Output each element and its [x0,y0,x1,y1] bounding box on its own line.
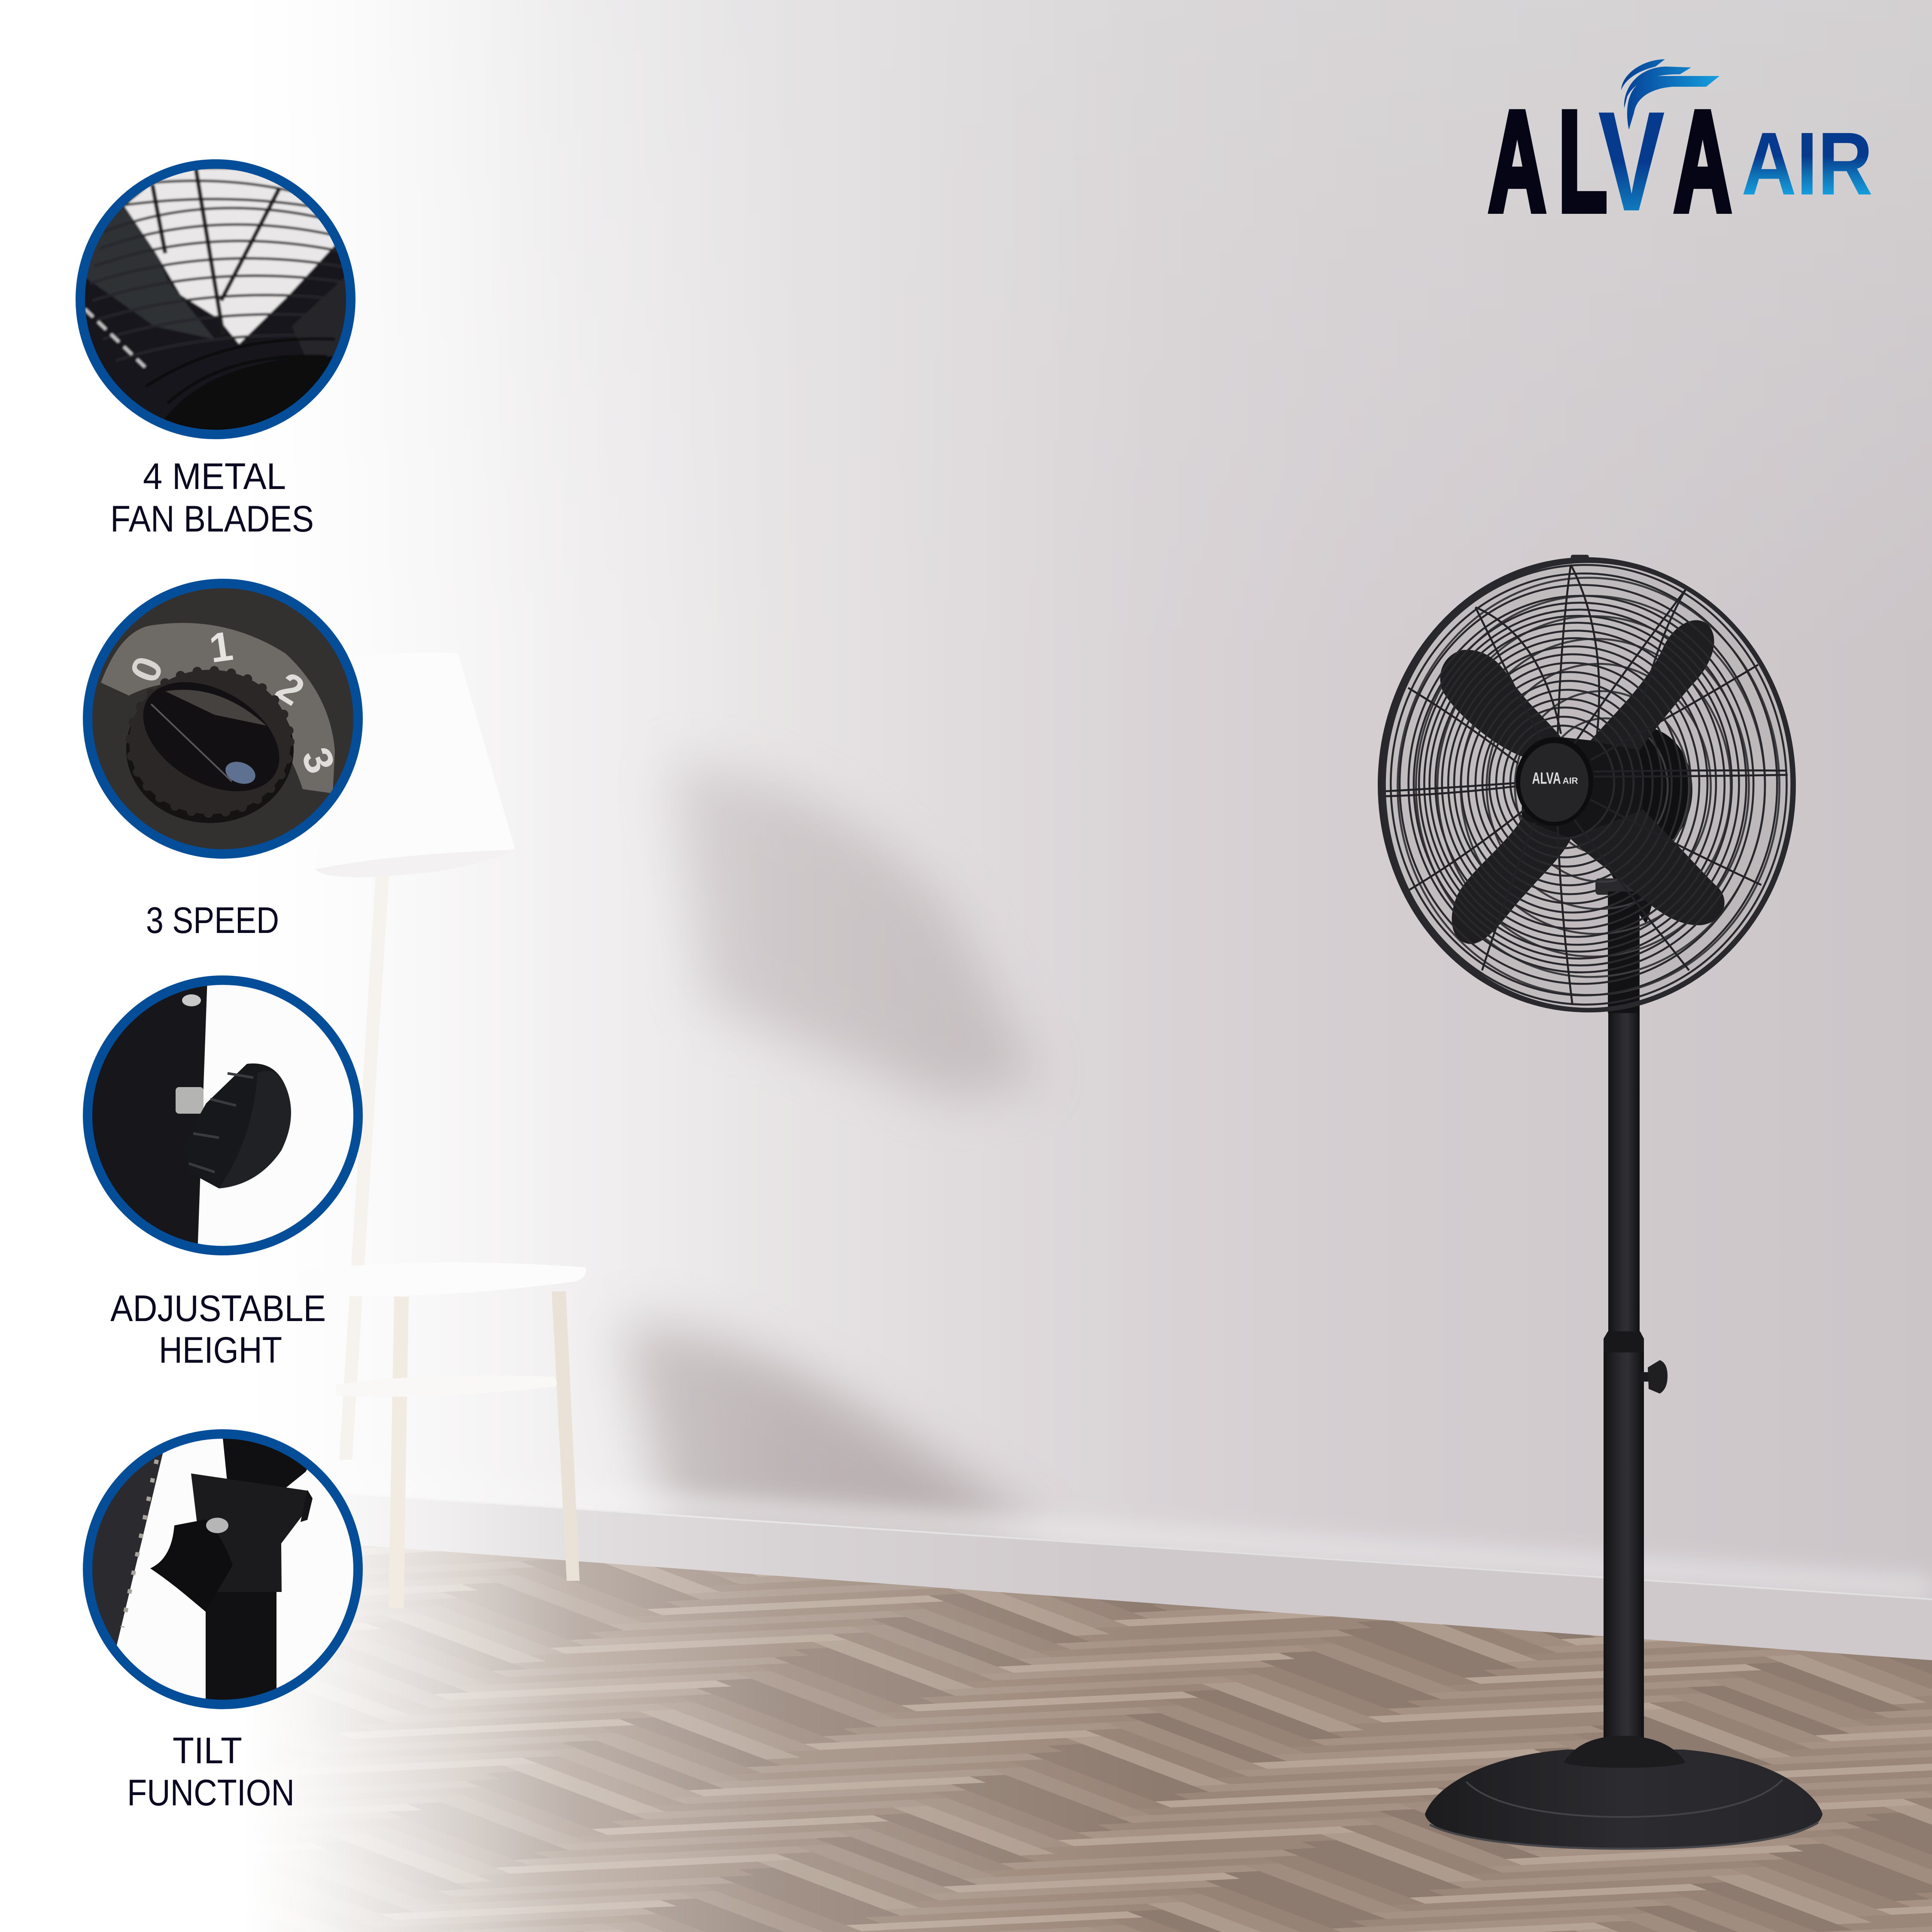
fan head [1380,555,1794,1013]
photo: tilt bracket [86,1434,361,1717]
lamp shade underside [315,850,515,877]
logo wordmark ALVA [1488,82,1732,240]
photo: speed knob [86,584,361,859]
label: tilt function: TILT [173,1730,242,1771]
photo: grille and blades [82,165,356,436]
photo: speed knob: 2 [268,663,312,714]
feature 4: tilt joint [86,1434,361,1717]
logo wordmark AIR: AIR [1741,114,1873,214]
logo feathers [1621,59,1719,130]
height knob [1640,1360,1668,1394]
photo: speed knob: 0 [121,650,172,689]
lamp and stool [299,653,586,1608]
label: 4 metal fan blades [110,456,314,540]
feature 2: speed dial [86,583,361,859]
label: adjustable height: ADJUSTABLE [110,1288,326,1329]
shadow: lamp shade on wall [670,764,1039,1099]
baseboard [0,1460,1932,1660]
fan pole lower [1604,1352,1644,1747]
shadow: stool on wall [618,1322,1048,1537]
hub with badge: AIR [1563,776,1578,786]
lamp shade [315,653,515,877]
rear grille wires [1397,578,1780,995]
label: tilt function [127,1730,295,1814]
logo wordmark ALVA: V [1598,82,1665,240]
hub with badge: ALVA [1532,769,1561,788]
grille tint [1380,559,1792,1010]
motor [1587,727,1692,1013]
logo: ALVA AIR [1488,59,1873,240]
stand fan product [1380,555,1823,1849]
ring [80,164,351,434]
photo: height knob on pole [86,979,361,1254]
photo: speed knob: 1 [207,623,236,671]
grille spokes [1383,565,1788,1005]
stool back leg [552,1291,580,1581]
label: 4 metal fan blades: FAN BLADES [110,498,314,540]
fan blades [1440,620,1725,944]
label: adjustable height: HEIGHT [159,1330,282,1371]
feature 3: height adjust knob [86,979,361,1254]
logo wordmark ALVA: A [1674,82,1732,240]
stool shelf [336,1376,557,1397]
label: 4 metal fan blades: 4 METAL [143,456,286,497]
ring [88,583,358,854]
floor: herringbone parquet [0,1519,1932,1932]
photo: speed knob: 3 [293,741,344,780]
fan pole upper [1608,902,1640,1335]
outer rim [1380,555,1794,1010]
lamp pole [339,876,389,1460]
label: adjustable height [110,1288,326,1371]
ring [88,980,358,1251]
stool top [299,1262,586,1296]
stool front leg [389,1297,409,1608]
front grille rings [1384,565,1786,1005]
logo wordmark ALVA: AL [1488,82,1607,240]
hub with badge [1516,737,1593,826]
ring [88,1434,358,1704]
fan pole collar [1604,1331,1644,1354]
label: 3 speed: 3 SPEED [146,900,279,941]
label: tilt function: FUNCTION [127,1772,295,1814]
base plate [1425,1736,1823,1849]
feature 1: metal fan blades [80,164,356,436]
